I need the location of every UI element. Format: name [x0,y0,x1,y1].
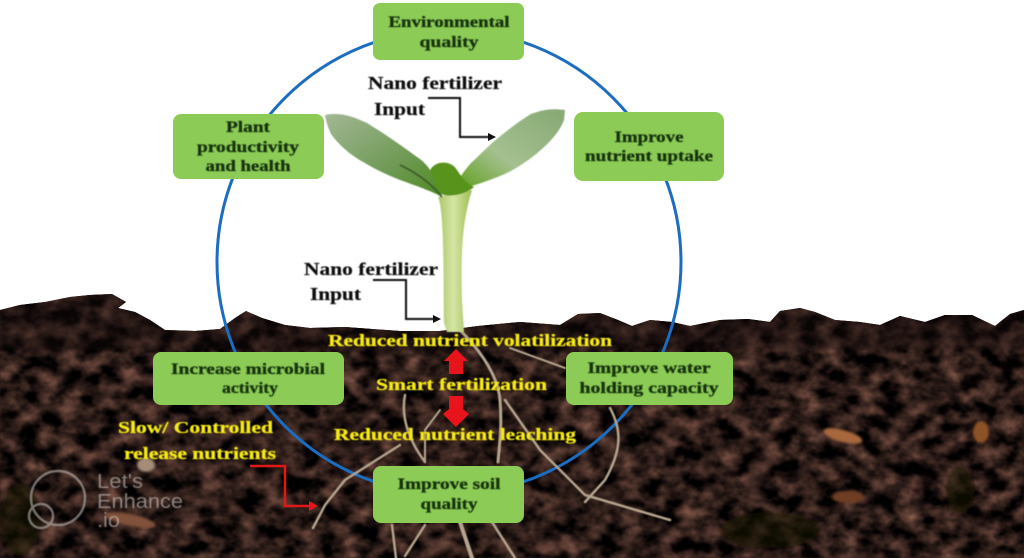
arrow: to leaf [428,98,490,137]
central bud [430,163,474,196]
label: soil nano fertilizer input [304,259,438,319]
arrow: up red [444,349,468,374]
box: plant productivity and health: Plant [226,119,271,136]
box: improve soil quality: Improve soil [398,476,501,493]
arrow: red controlled release [250,466,318,511]
box: improve soil quality [373,466,524,523]
label: leaf nano fertilizer input: Input [374,99,425,119]
watermark: Let's Enhance: Enhance [97,491,183,513]
box: improve nutrient uptake [574,112,724,181]
box: improve soil quality: quality [420,496,478,513]
box: plant productivity and health: and health [206,158,291,175]
box: improve nutrient uptake: Improve [614,129,684,146]
left leaf [325,114,442,197]
box: plant productivity and health [173,114,324,179]
box: improve water holding capacity: Improve water [588,360,710,377]
box: increase microbial activity: Increase microbial [171,361,326,378]
soil ground [0,285,1024,558]
plant seedling [325,109,565,332]
label: leaf nano fertilizer input: Nano fertilizer [368,73,502,93]
box: environmental quality [373,3,524,60]
arrow: down red [443,396,469,427]
box: increase microbial activity: activity [222,380,278,397]
left leaf shadow vein [400,165,442,197]
watermark: Let's Enhance: Let's [97,471,143,493]
text: smart fertilization: Smart fertilization [376,375,548,394]
box: increase microbial activity [153,352,344,405]
label: soil nano fertilizer input: Input [310,284,361,304]
label: soil nano fertilizer input: Nano fertilizer [304,259,438,279]
arrowhead: stem input [433,315,441,323]
stem [438,190,472,332]
box: plant productivity and health: productivity [197,139,299,156]
right leaf [458,109,565,187]
box: environmental quality: Environmental [388,14,510,31]
box: improve water holding capacity: holding capacity [580,380,718,397]
box: environmental quality: quality [420,34,478,51]
box: improve nutrient uptake: nutrient uptake [585,148,713,165]
text: slow controlled release nutrients: release nutrients [124,444,276,463]
plant roots [313,328,670,558]
text: slow controlled release nutrients: Slow/ Controlled [118,418,274,437]
label: leaf nano fertilizer input [368,73,502,137]
arrow: to stem base [373,280,435,319]
circular cycle ring [217,30,681,494]
box: improve water holding capacity [566,352,733,405]
watermark: Let's Enhance: .io [97,510,120,532]
text: reduced nutrient volatilization: Reduced nutrient volatilization [328,331,613,350]
text: reduced nutrient leaching: Reduced nutrient leaching [334,425,577,444]
watermark: Let's Enhance [29,471,183,532]
text: slow controlled release nutrients [118,418,276,463]
arrowhead: leaf input [488,133,496,141]
